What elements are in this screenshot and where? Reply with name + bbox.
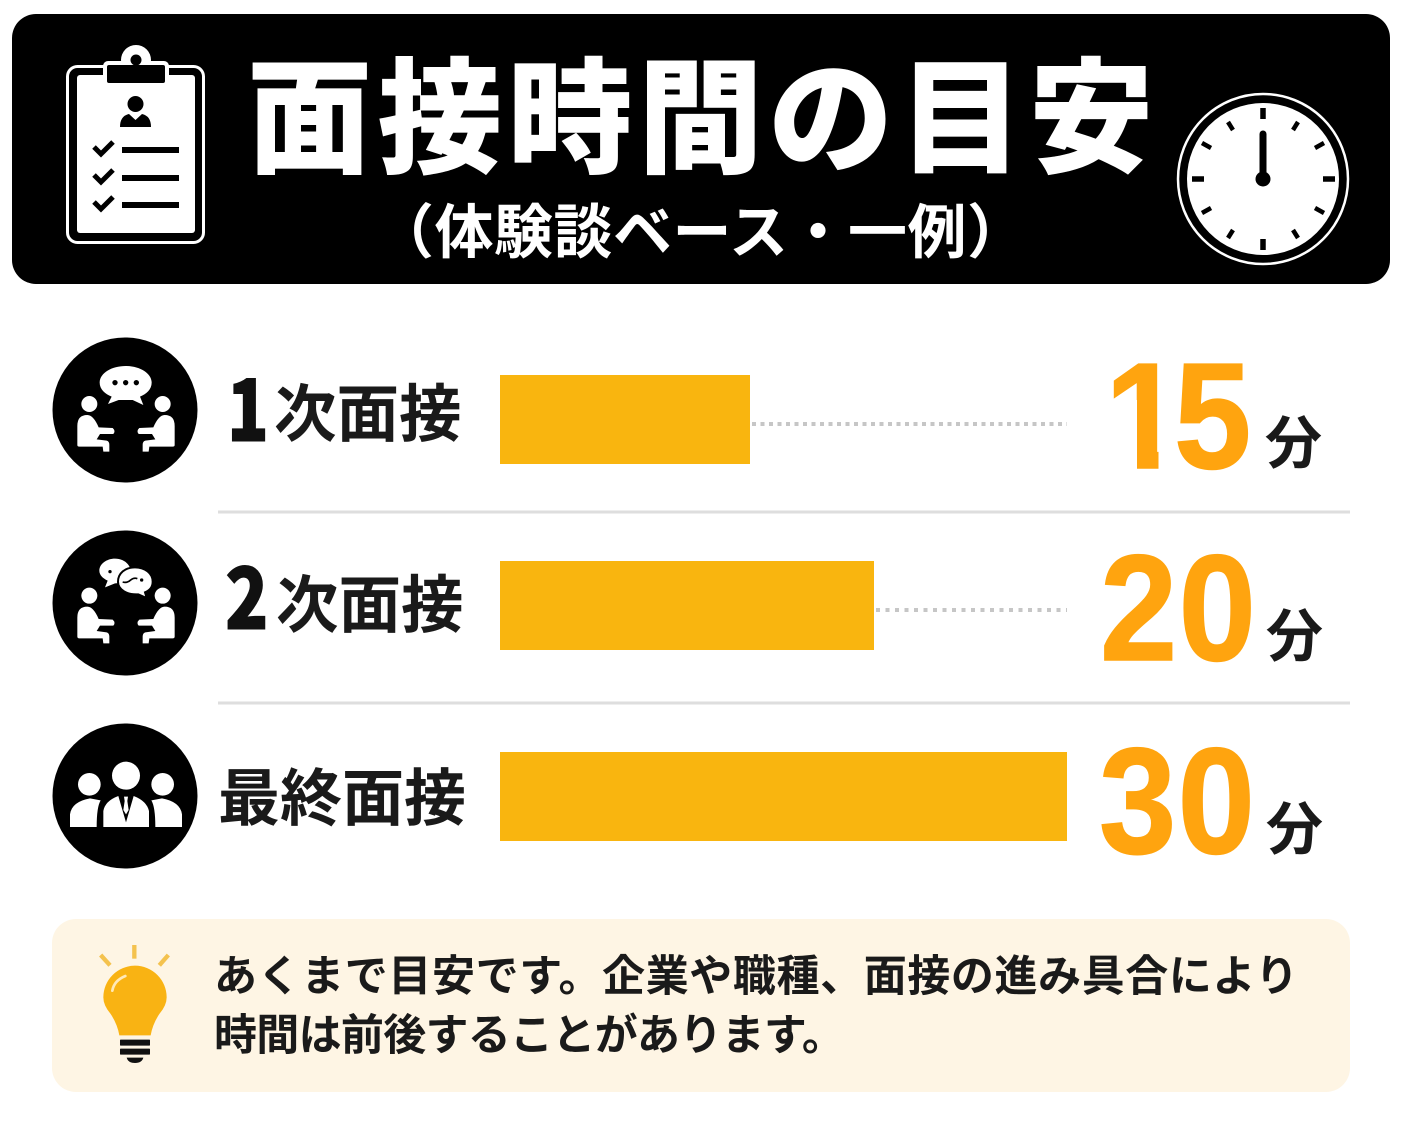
icon: clipboard	[68, 45, 204, 242]
value: 1	[1105, 332, 1182, 500]
row: 1次面接: 分	[1265, 398, 1322, 480]
label: 最終面接	[218, 748, 466, 838]
row: 1次面接	[52, 338, 1322, 482]
header banner	[12, 14, 1390, 284]
bar: 15 minutes	[500, 375, 750, 464]
value: 5	[1174, 332, 1251, 500]
label: 1	[227, 345, 269, 466]
row: 2次面接: 分	[1266, 591, 1323, 673]
title: 面接時間の目安	[247, 18, 1159, 199]
row: 2次面接	[52, 524, 1323, 692]
icon: light bulb	[101, 945, 168, 1063]
bar: 20 minutes	[500, 561, 874, 650]
row: 2次面接: 次面接	[276, 554, 464, 645]
row: 最終面接	[52, 717, 1323, 885]
row: 1次面接: 次面接	[274, 363, 462, 454]
bar: 30 minutes	[500, 752, 1067, 841]
row: 最終面接: 分	[1266, 784, 1323, 866]
note text: 時間は前後することがあります。	[214, 1001, 844, 1063]
icon: clock	[1178, 94, 1348, 264]
icon: group of three people	[52, 724, 198, 868]
value: 20	[1100, 524, 1257, 692]
value: 30	[1099, 717, 1256, 885]
note text: あくまで目安です。企業や職種、面接の進み具合により	[214, 942, 1299, 1004]
value	[1114, 363, 1248, 470]
icon: two people with two bubbles	[52, 530, 198, 676]
label: 2	[225, 533, 268, 654]
icon: two people talking with speech bubble	[52, 338, 198, 482]
subtitle: （体験談ベース・一例）	[375, 185, 1027, 270]
note panel	[52, 919, 1350, 1092]
